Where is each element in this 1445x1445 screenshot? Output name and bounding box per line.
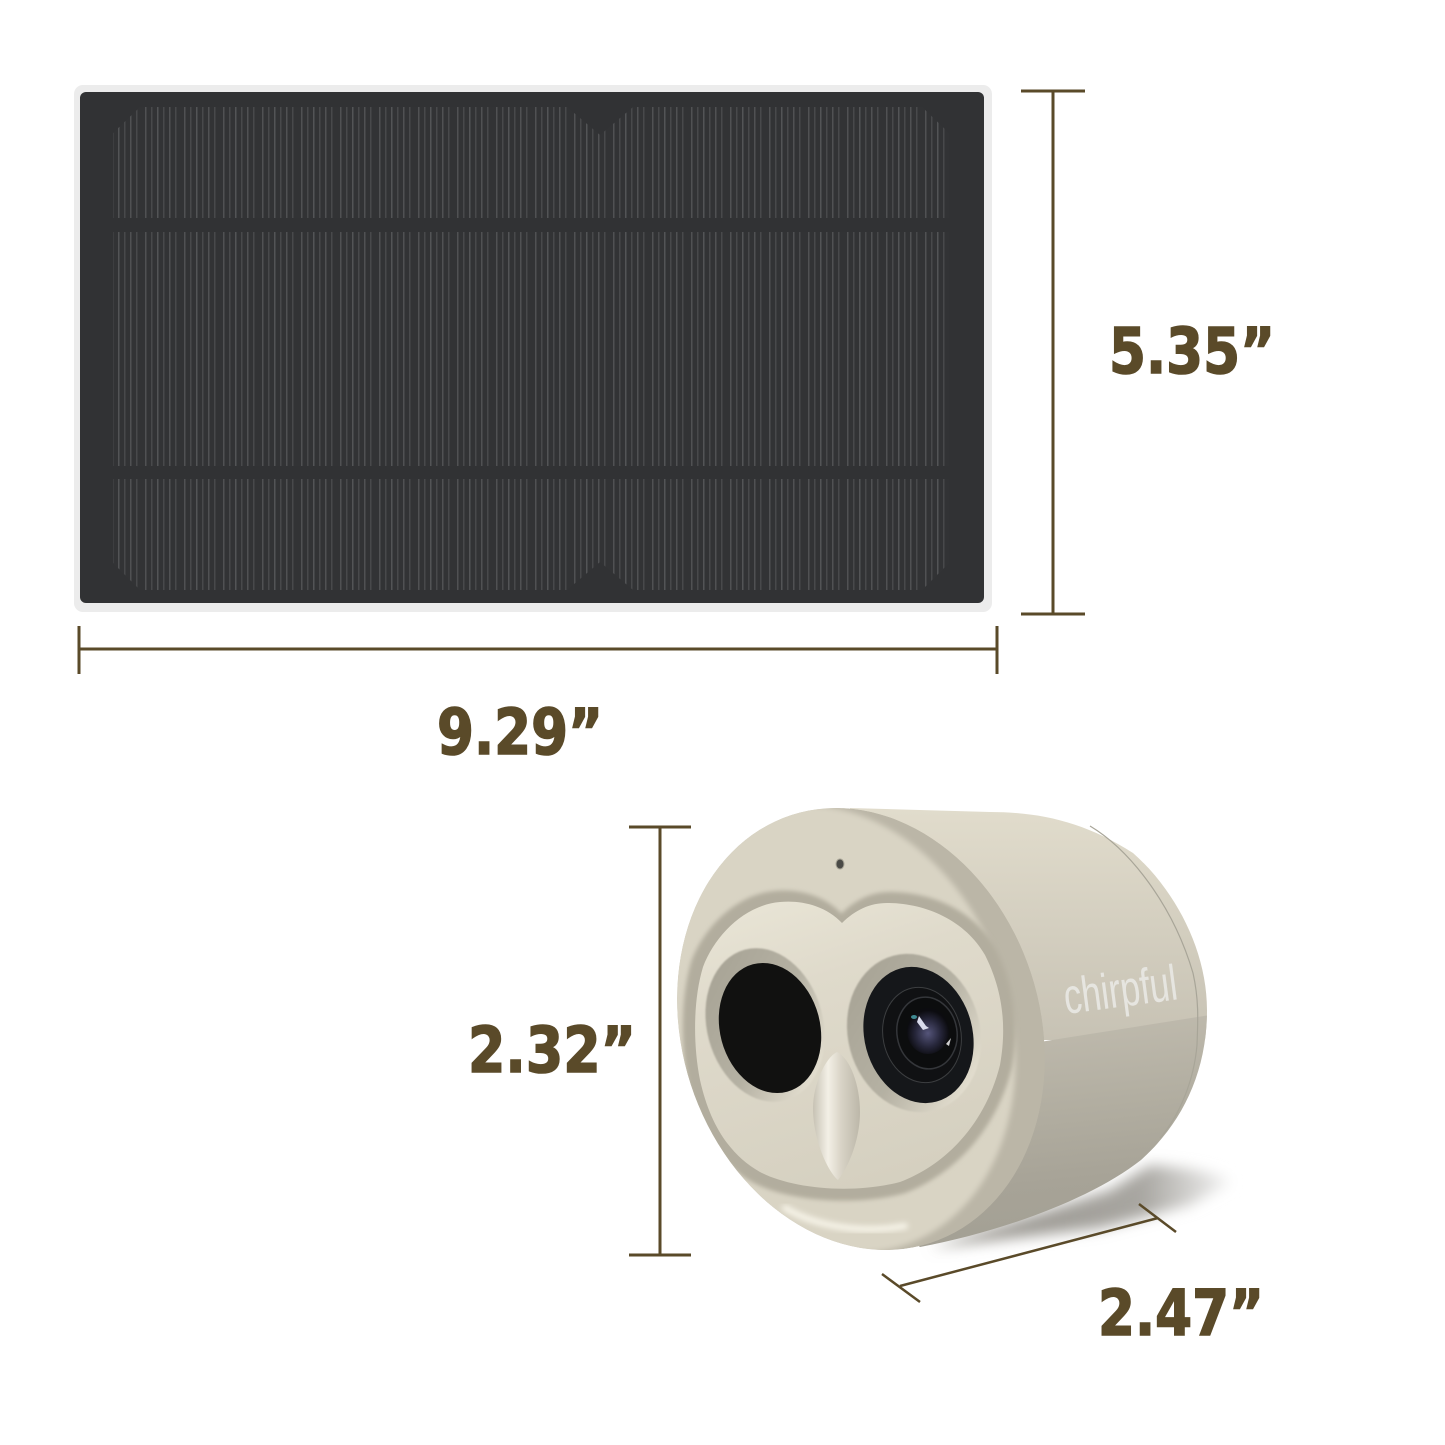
owl face disc bbox=[695, 902, 1003, 1189]
rim shaded side bbox=[677, 808, 1044, 1250]
rim bottom highlight bbox=[785, 1208, 905, 1229]
dimension: panel width bbox=[79, 626, 997, 674]
right eye / camera lens bbox=[848, 954, 989, 1116]
lens reflection bbox=[917, 1016, 929, 1030]
left eye bbox=[705, 951, 835, 1105]
label: 2.32 inches: 2.32” bbox=[468, 1014, 636, 1087]
camera body bbox=[850, 808, 1207, 1247]
logo: chirpful: chirpful bbox=[1060, 955, 1180, 1025]
camera bbox=[677, 808, 1207, 1250]
body lower surface bbox=[918, 1016, 1207, 1247]
lens housing bbox=[848, 954, 989, 1116]
body upper surface bbox=[840, 800, 1220, 1040]
panel: solar panel bbox=[74, 85, 992, 612]
body seam bbox=[1090, 826, 1198, 1138]
left eye socket bbox=[689, 935, 841, 1115]
solar panel frame bbox=[74, 85, 992, 612]
face groove bbox=[683, 891, 1016, 1201]
dimension: camera height bbox=[629, 827, 691, 1255]
lens glass bbox=[907, 1008, 949, 1054]
front rim bbox=[677, 808, 1044, 1250]
lens glint bbox=[946, 1038, 951, 1046]
label: 9.29 inches: 9.29” bbox=[437, 696, 603, 769]
label: 2.47 inches: 2.47” bbox=[1098, 1277, 1264, 1350]
rim lit face bbox=[677, 808, 1017, 1250]
solar cells: top row bbox=[113, 107, 949, 218]
beak bbox=[813, 1052, 860, 1180]
dimension: panel height bbox=[1021, 91, 1085, 614]
lens outer ring bbox=[874, 980, 970, 1090]
lens inner ring bbox=[891, 992, 963, 1074]
dimension: camera depth bbox=[882, 1204, 1176, 1302]
solar cells: bottom row bbox=[113, 479, 949, 590]
label: 5.35 inches: 5.35” bbox=[1109, 315, 1275, 388]
lens teal glint bbox=[911, 1015, 917, 1019]
solar panel surface bbox=[80, 92, 984, 603]
solar cells: middle row bbox=[113, 232, 949, 466]
microphone dot bbox=[836, 859, 844, 869]
right eye socket bbox=[830, 939, 998, 1127]
shadow under camera bbox=[930, 1165, 1232, 1248]
